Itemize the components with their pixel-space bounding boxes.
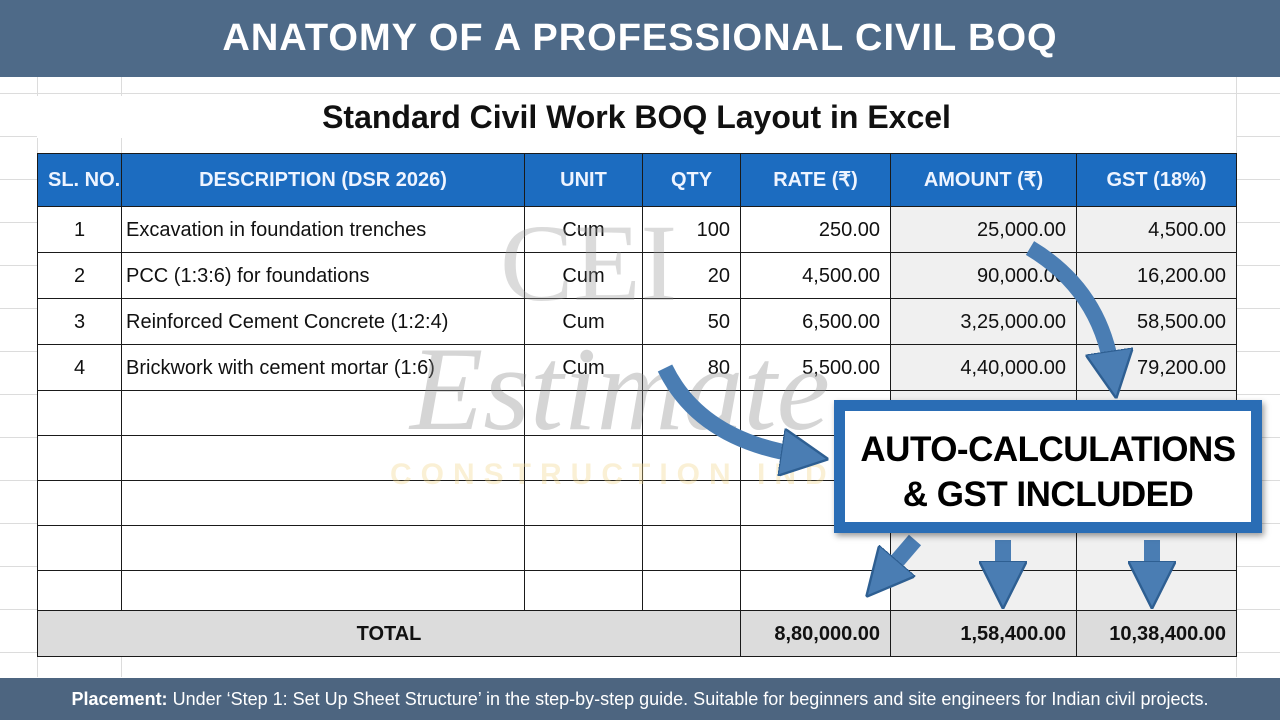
table: BOQ: 25,000.00 xyxy=(977,218,1066,240)
table: BOQ: PCC (1:3:6) for foundations xyxy=(126,264,369,286)
arrow: top curved xyxy=(1030,248,1112,370)
table: BOQ: 10,38,400.00 xyxy=(1109,622,1226,644)
table: BOQ: 250.00 xyxy=(819,218,880,240)
table: BOQ: 2 xyxy=(74,264,85,286)
table: BOQ: 1 xyxy=(74,218,85,240)
table: BOQ: 8,80,000.00 xyxy=(774,622,880,644)
table: BOQ: AMOUNT (₹) xyxy=(924,169,1043,191)
table: BOQ: Brickwork with cement mortar (1:6) xyxy=(126,356,435,378)
subtitle xyxy=(37,96,1236,138)
table: BOQ: Excavation in foundation trenches xyxy=(126,218,426,240)
watermark: Estimate xyxy=(410,322,830,455)
table: BOQ: TOTAL xyxy=(357,622,421,644)
watermark xyxy=(390,202,884,491)
table: BOQ: Cum xyxy=(562,310,605,332)
arrow: diag down xyxy=(885,540,915,575)
watermark: CONSTRUCTION INDIA xyxy=(390,458,884,491)
table: BOQ: UNIT xyxy=(560,169,607,191)
watermark: CEI xyxy=(500,202,677,324)
table: BOQ: 4 xyxy=(74,356,85,378)
table: BOQ: 50 xyxy=(708,310,730,332)
table: BOQ: 90,000.00 xyxy=(977,264,1066,286)
table: BOQ: 58,500.00 xyxy=(1137,310,1226,332)
table: BOQ: Cum xyxy=(562,218,605,240)
table: BOQ: 4,500.00 xyxy=(802,264,880,286)
table: BOQ: DESCRIPTION (DSR 2026) xyxy=(199,169,447,191)
table: BOQ: 1,58,400.00 xyxy=(960,622,1066,644)
table: BOQ: 100 xyxy=(697,218,730,240)
footer: Placement: Under ‘Step 1: Set Up Sheet Structure’ in the step-by-step guide. Suitable for beginners and site engineers for Indian civil projects. xyxy=(72,689,1208,709)
table: BOQ: RATE (₹) xyxy=(773,169,858,191)
title xyxy=(0,0,1280,77)
table: BOQ: GST (18%) xyxy=(1106,169,1207,191)
table: BOQ: Cum xyxy=(562,356,605,378)
table: BOQ: 5,500.00 xyxy=(802,356,880,378)
table: BOQ: 4,500.00 xyxy=(1148,218,1226,240)
subtitle: Standard Civil Work BOQ Layout in Excel xyxy=(322,99,951,135)
table: BOQ: 4,40,000.00 xyxy=(960,356,1066,378)
table: BOQ: Cum xyxy=(562,264,605,286)
table: BOQ: 79,200.00 xyxy=(1137,356,1226,378)
table: BOQ: 3,25,000.00 xyxy=(960,310,1066,332)
arrow: down right xyxy=(1144,540,1160,580)
callout xyxy=(834,400,1262,533)
footer xyxy=(0,678,1280,720)
arrow: down mid xyxy=(995,540,1011,580)
table: BOQ: QTY xyxy=(671,169,712,191)
table: BOQ: 20 xyxy=(708,264,730,286)
table: BOQ: 80 xyxy=(708,356,730,378)
table: BOQ: 3 xyxy=(74,310,85,332)
callout: & GST INCLUDED xyxy=(903,475,1193,514)
title: ANATOMY OF A PROFESSIONAL CIVIL BOQ xyxy=(222,17,1058,59)
table: BOQ: SL. NO. xyxy=(48,169,120,191)
arrow: left curved xyxy=(665,368,800,455)
table: BOQ: 16,200.00 xyxy=(1137,264,1226,286)
table: BOQ: Reinforced Cement Concrete (1:2:4) xyxy=(126,310,448,332)
table: BOQ xyxy=(37,153,1237,657)
callout: AUTO-CALCULATIONS xyxy=(860,430,1236,469)
table: BOQ: 6,500.00 xyxy=(802,310,880,332)
